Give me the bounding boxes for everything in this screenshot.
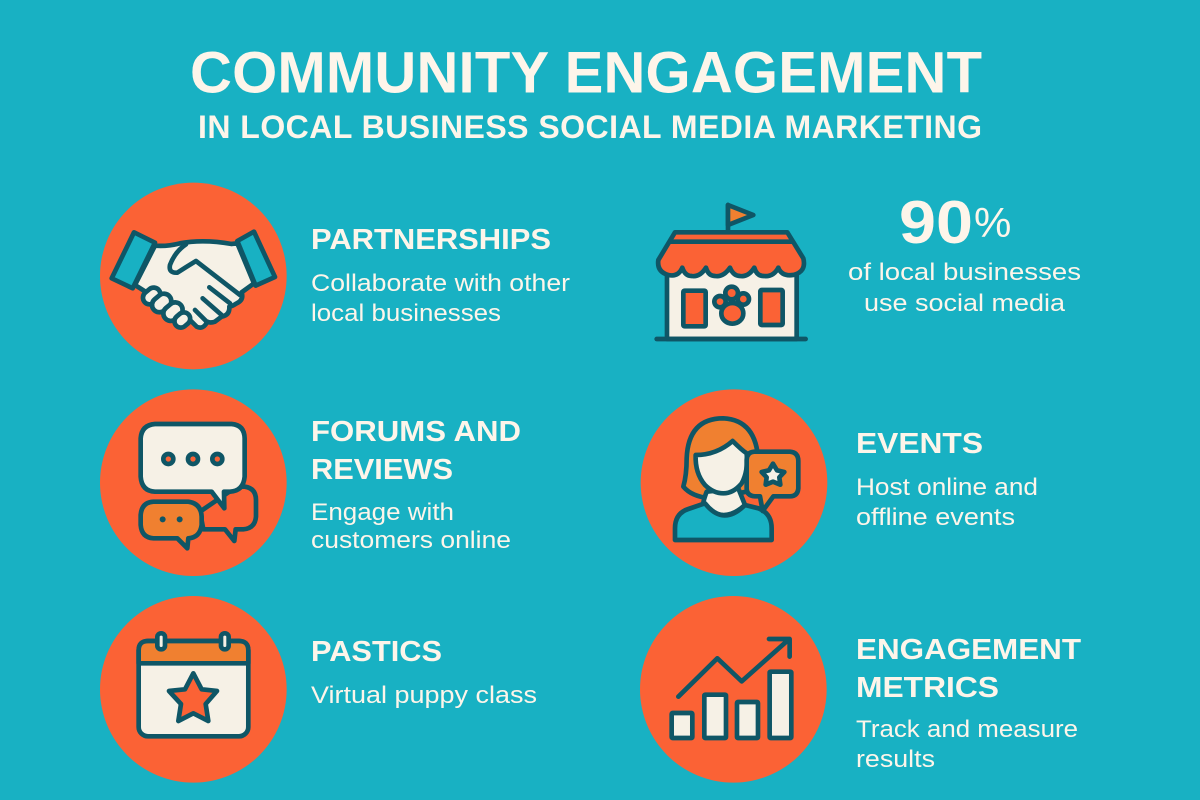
text: partnerships description: Collaborate with other: [311, 270, 570, 297]
text: events description: Host online and: [856, 474, 1038, 501]
panel: 90% statistic: [657, 189, 1081, 339]
icon: person with star bubble: [641, 389, 827, 576]
panel: events: [641, 389, 1038, 576]
text: metrics description: Track and measure: [856, 716, 1078, 743]
text: events description: offline events: [856, 504, 1015, 531]
text: metrics description: results: [856, 746, 935, 773]
panel: forums and reviews: [100, 389, 521, 576]
heading: events: EVENTS: [856, 428, 983, 460]
text: forums description: Engage with: [311, 499, 454, 526]
heading: forums and reviews: REVIEWS: [311, 454, 453, 486]
heading: forums and reviews: FORUMS AND: [311, 416, 521, 448]
icon: handshake: [100, 183, 287, 369]
heading: pastics: PASTICS: [311, 636, 442, 668]
text: partnerships description: local businesses: [311, 300, 501, 327]
statistic: 90%: %: [974, 199, 1011, 246]
text: statistic description: of local businesses: [848, 259, 1081, 286]
icon: storefront with paw: [657, 205, 806, 339]
heading: partnerships: PARTNERSHIPS: [311, 224, 551, 256]
statistic: 90%: 90: [899, 189, 973, 256]
panel: engagement metrics: [640, 596, 1081, 783]
icon: bar chart with arrow: [640, 596, 827, 783]
panel: partnerships: [100, 183, 570, 369]
heading: engagement metrics: METRICS: [856, 672, 999, 704]
subtitle: IN LOCAL BUSINESS SOCIAL MEDIA MARKETING: [198, 109, 982, 145]
heading: engagement metrics: ENGAGEMENT: [856, 634, 1081, 666]
title: COMMUNITY ENGAGEMENT: [190, 40, 982, 106]
text: forums description: customers online: [311, 527, 511, 554]
icon: calendar with star: [100, 596, 287, 783]
text: statistic description: use social media: [864, 290, 1065, 317]
text: pastics description: Virtual puppy class: [311, 682, 537, 709]
panel: pastics: [100, 596, 537, 783]
icon: chat bubbles: [100, 389, 287, 576]
